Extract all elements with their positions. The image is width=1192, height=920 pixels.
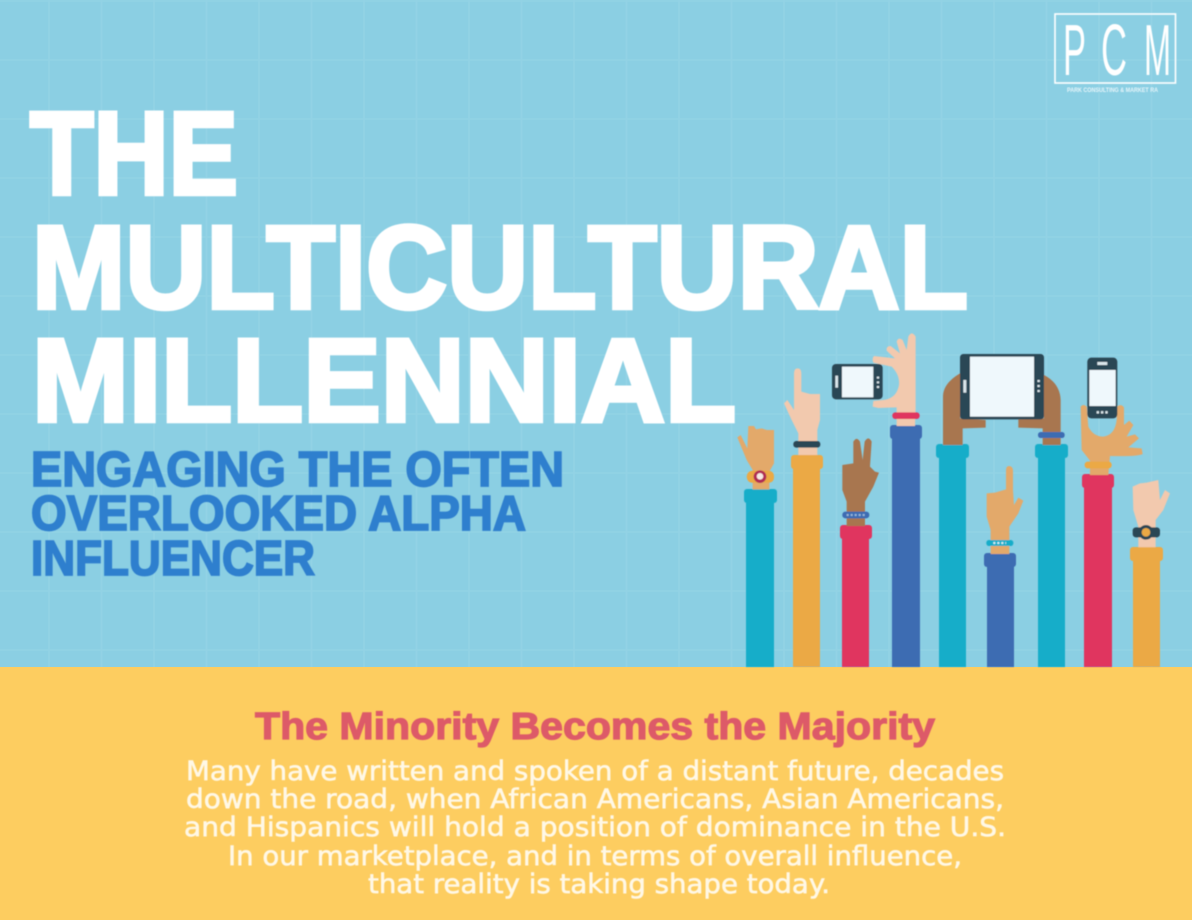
logo: PCM: C bbox=[1101, 11, 1127, 91]
arm 8: red sleeve, hand holding phone bbox=[1081, 358, 1143, 667]
arm 7: blue sleeve, pointing hand bbox=[984, 466, 1023, 667]
title: MILLENNIAL bbox=[32, 315, 736, 447]
arm 5 and 6: teal sleeves, brown hands holding tablet bbox=[936, 354, 1068, 667]
illustration: raised arms with devices bbox=[737, 333, 1170, 667]
title: THE bbox=[30, 88, 238, 220]
logo: PCM: PARK CONSULTING & MARKET RA bbox=[1067, 88, 1159, 94]
arm 3: red sleeve, peace sign hand bbox=[840, 438, 879, 667]
subtitle: OVERLOOKED ALPHA bbox=[31, 487, 526, 541]
arm 4: blue sleeve, hand holding phone bbox=[832, 333, 922, 667]
subtitle: INFLUENCER bbox=[31, 532, 315, 586]
text block: intro paragraph bbox=[184, 756, 1006, 900]
arm 1: teal sleeve, tan hand, heart bracelet bbox=[737, 426, 777, 667]
text block: intro paragraph: In our marketplace, and in terms of overall influence, bbox=[228, 841, 962, 872]
subtitle bbox=[31, 443, 564, 586]
text block: intro paragraph: that reality is taking shape today. bbox=[368, 869, 830, 900]
text block: intro paragraph: and Hispanics will hold a position of dominance in the U.S. bbox=[184, 812, 1006, 843]
subtitle: ENGAGING THE OFTEN bbox=[31, 443, 564, 497]
logo: PCM bbox=[1055, 11, 1176, 94]
arm 9: orange sleeve, open hand with watch bbox=[1130, 480, 1170, 667]
arm 2: orange sleeve, pointing hand bbox=[784, 368, 823, 667]
title bbox=[30, 88, 968, 447]
title: MULTICULTURAL bbox=[32, 202, 968, 334]
panel: yellow intro background bbox=[0, 667, 1192, 920]
heading: The Minority Becomes the Majority: The Minority Becomes the Majority bbox=[255, 706, 935, 748]
text block: intro paragraph: Many have written and spoken of a distant future, decades bbox=[186, 756, 1004, 787]
text block: intro paragraph: down the road, when African Americans, Asian Americans, bbox=[186, 784, 1004, 815]
logo: PCM: P bbox=[1063, 11, 1086, 91]
panel: blue header background bbox=[0, 0, 1192, 667]
